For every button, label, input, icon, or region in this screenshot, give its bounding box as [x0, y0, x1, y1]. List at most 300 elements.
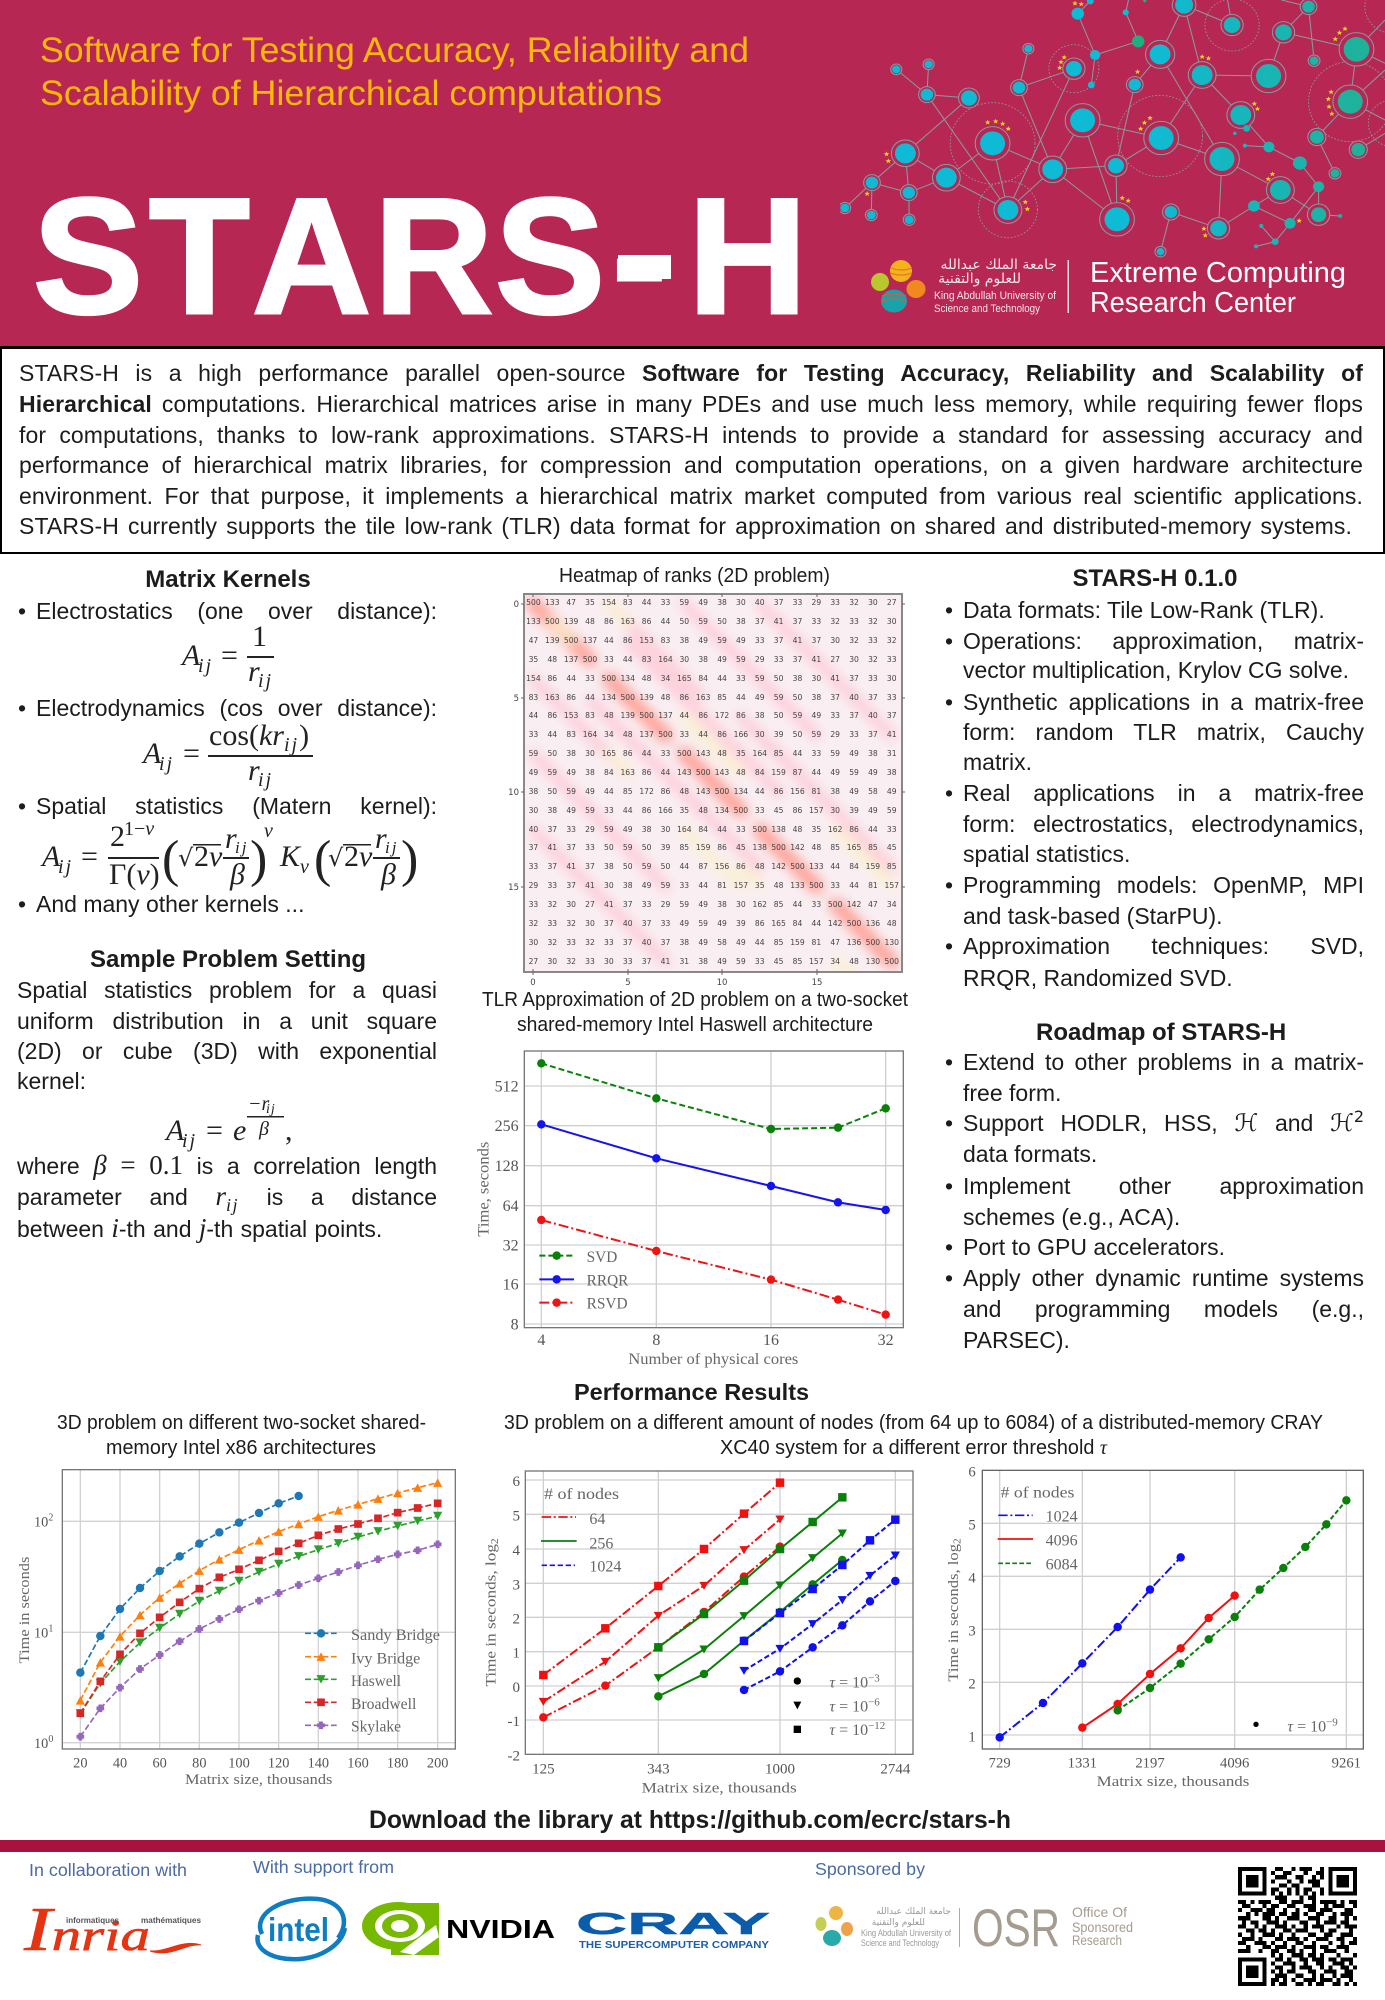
heatmap of ranks: 38	[736, 617, 746, 626]
heatmap of ranks: 157	[884, 881, 899, 890]
heatmap of ranks: 500	[884, 957, 899, 966]
heatmap of ranks: 133	[790, 881, 805, 890]
label: sponsored by: Sponsored by	[815, 1859, 925, 1879]
heatmap of ranks: 130	[884, 938, 899, 947]
heatmap of ranks: 30	[604, 957, 614, 966]
heatmap of ranks: 85	[793, 957, 802, 966]
heatmap of ranks: 154	[526, 674, 541, 683]
heatmap of ranks: 59	[736, 957, 746, 966]
heatmap of ranks: 38	[717, 598, 727, 607]
heatmap of ranks: 32	[868, 617, 878, 626]
heatmap of ranks: 32	[566, 919, 576, 928]
heatmap of ranks: 49	[698, 636, 708, 645]
heatmap of ranks: 45	[774, 806, 783, 815]
panel: STARS-H 0.1.0: spatial statistics.	[963, 841, 1130, 867]
line chart: TLR approximation time vs cores	[475, 1050, 904, 1368]
heatmap of ranks: 500	[564, 636, 578, 645]
line chart: TLR approximation time vs cores: 8	[511, 1316, 519, 1333]
heatmap of ranks: 33	[774, 655, 783, 664]
heatmap of ranks: 33	[811, 900, 821, 909]
heatmap of ranks: 85	[774, 900, 783, 909]
heatmap of ranks: 32	[887, 636, 897, 645]
QR code	[1238, 1867, 1357, 1986]
heatmap of ranks: 30	[830, 806, 840, 815]
heatmap of ranks: 33	[604, 938, 614, 947]
line chart: TLR approximation time vs cores: 64	[503, 1198, 519, 1215]
heatmap of ranks: 500	[639, 711, 654, 720]
heatmap of ranks: 139	[564, 617, 578, 626]
logo: KAUST and Extreme Computing Research Center: Science and Technology	[934, 303, 1040, 315]
heatmap of ranks: 35	[585, 598, 595, 607]
heatmap of ranks: 33	[547, 919, 557, 928]
line chart: TLR approximation time vs cores: 16	[763, 1332, 779, 1349]
heatmap of ranks: 5	[625, 978, 631, 988]
heatmap of ranks: 44	[755, 787, 765, 796]
heatmap of ranks: 500	[583, 655, 597, 664]
heatmap of ranks: 37	[774, 598, 783, 607]
heatmap of ranks: 33	[849, 617, 859, 626]
formula: Matern kernel: )	[250, 831, 267, 888]
chart title: x86 architectures: 3D problem on different two-socket shared-	[57, 1412, 426, 1434]
panel: sample problem setting: where β = 0.1 is a correlation length	[17, 1150, 437, 1180]
line chart: node scaling 64 to 1024: 5	[512, 1508, 520, 1524]
heatmap of ranks: 157	[809, 806, 824, 815]
heatmap of ranks: 38	[529, 787, 538, 796]
heatmap of ranks: 41	[887, 730, 897, 739]
heatmap of ranks: 37	[774, 636, 783, 645]
line chart: node scaling 64 to 1024	[483, 1470, 914, 1796]
heatmap of ranks: 44	[717, 825, 727, 834]
heatmap of ranks: 165	[771, 919, 786, 928]
formula: electrostatics: ij	[198, 655, 213, 677]
formula: electrostatics: A	[180, 639, 201, 672]
heatmap of ranks: 81	[811, 938, 821, 947]
heatmap of ranks: 59	[661, 881, 670, 890]
formula: Matern kernel: K	[279, 840, 302, 873]
heatmap of ranks: 49	[811, 711, 821, 720]
heatmap of ranks: 133	[526, 617, 541, 626]
heatmap of ranks: 38	[698, 655, 708, 664]
heatmap of ranks: 86	[623, 636, 633, 645]
heatmap of ranks: 500	[752, 825, 767, 834]
panel: matrix kernels: And many other kernels ...	[36, 891, 304, 917]
heatmap of ranks: 44	[642, 749, 651, 758]
heatmap of ranks: 0	[514, 600, 519, 610]
formula: electrodynamics: ij	[258, 769, 273, 791]
heatmap of ranks: 86	[661, 787, 670, 796]
formula: Matern kernel	[40, 818, 418, 891]
formula: Matern kernel: 1−ν	[124, 818, 154, 840]
formula: Matern kernel: Γ(ν)	[109, 858, 160, 891]
line chart: TLR approximation time vs cores: 256	[495, 1118, 519, 1135]
heatmap of ranks: 136	[847, 938, 861, 947]
heatmap of ranks: 86	[736, 862, 746, 871]
heatmap of ranks: 49	[849, 749, 859, 758]
heatmap of ranks: 500	[677, 749, 692, 758]
label: with support from: With support from	[253, 1857, 394, 1877]
heatmap of ranks: 164	[658, 655, 673, 664]
heatmap of ranks: 33	[661, 919, 670, 928]
heatmap of ranks: 30	[547, 957, 557, 966]
heatmap of ranks: 48	[623, 730, 633, 739]
heatmap of ranks: 49	[717, 655, 727, 664]
formula: Matern kernel: ν	[264, 820, 275, 842]
panel: roadmap of STARS-H: Support HODLR, HSS, ℋ and ℋ2	[963, 1107, 1364, 1137]
heatmap of ranks: 30	[736, 598, 746, 607]
heatmap of ranks: 37	[642, 957, 651, 966]
heatmap of ranks: 86	[566, 693, 576, 702]
formula: electrodynamics: r	[248, 754, 260, 787]
heatmap of ranks: 44	[623, 655, 633, 664]
heatmap of ranks: 500	[696, 768, 710, 777]
heatmap of ranks: 33	[679, 730, 689, 739]
legend: node counts: 4096	[1046, 1533, 1078, 1550]
heatmap of ranks: 166	[658, 806, 673, 815]
heatmap of ranks: 50	[547, 787, 557, 796]
heatmap of ranks: 33	[585, 957, 595, 966]
heatmap of ranks: 58	[868, 787, 878, 796]
line chart: node scaling 1024 to 6084: 729	[989, 1755, 1011, 1771]
line chart: time by architecture: 20	[73, 1756, 87, 1772]
line chart: node scaling 1024 to 6084: 5	[968, 1518, 976, 1534]
panel: STARS-H 0.1.0: Programming models: OpenMP, MPI	[963, 872, 1364, 898]
logo: KAUST Office of Sponsored Research: Office Of	[1072, 1904, 1127, 1920]
heatmap of ranks: 33	[585, 843, 595, 852]
subtitle	[40, 31, 749, 113]
heatmap of ranks: 85	[717, 693, 727, 702]
heatmap of ranks: 15	[508, 883, 519, 893]
line chart: time by architecture: 1	[48, 1624, 53, 1635]
line chart: time by architecture: 10	[34, 1626, 48, 1642]
intro text box: STARS-H currently supports the tile low-rank (TLR) data format for approximation on shared and distributed-memory systems.	[19, 513, 1352, 539]
heatmap of ranks: 33	[547, 881, 557, 890]
heatmap of ranks: 37	[566, 881, 576, 890]
heatmap of ranks: 38	[811, 693, 821, 702]
panel: STARS-H 0.1.0: and task-based (StarPU).	[963, 903, 1223, 929]
heatmap of ranks: 47	[830, 938, 840, 947]
heatmap of ranks: 40	[623, 919, 633, 928]
heatmap of ranks: 33	[642, 900, 651, 909]
intro text box: Hierarchical computations. Hierarchical matrices arise in many PDEs and use much less memory, while requiring fewer flops	[19, 391, 1363, 417]
legend: error threshold: −9	[1326, 1717, 1338, 1729]
formula: Matern kernel: β	[380, 858, 396, 891]
formula: Matern kernel: β	[229, 858, 245, 891]
heatmap of ranks: 159	[696, 843, 710, 852]
heatmap of ranks: 30	[887, 674, 897, 683]
heatmap of ranks: 33	[830, 598, 840, 607]
heatmap of ranks: 137	[658, 711, 673, 720]
heatmap of ranks: 41	[566, 862, 576, 871]
heatmap of ranks: 143	[715, 768, 729, 777]
legend: decomposition methods: SVD	[587, 1249, 617, 1266]
heatmap of ranks: 50	[661, 862, 670, 871]
panel: STARS-H 0.1.0: Synthetic applications in a matrix-free	[963, 689, 1364, 715]
formula: Matern kernel: r	[225, 822, 237, 855]
subtitle: Software for Testing Accuracy, Reliability and	[40, 31, 749, 70]
legend: node counts: 64	[589, 1511, 605, 1528]
heatmap of ranks: 49	[566, 806, 576, 815]
heatmap of ranks: 32	[830, 617, 840, 626]
heatmap of ranks: 49	[755, 693, 765, 702]
line chart: node scaling 1024 to 6084: 2	[968, 1677, 976, 1693]
heatmap of ranks: 85	[774, 749, 783, 758]
heatmap of ranks: 34	[830, 957, 840, 966]
line chart: node scaling 1024 to 6084: 3	[968, 1624, 976, 1640]
panel: sample problem setting	[17, 946, 437, 1243]
heatmap of ranks: 31	[887, 749, 897, 758]
heatmap of ranks: 86	[793, 806, 802, 815]
heatmap of ranks: 58	[717, 938, 727, 947]
line chart: TLR approximation time vs cores: Number of physical cores	[628, 1351, 798, 1368]
heatmap of ranks: 49	[717, 957, 727, 966]
heatmap of ranks: 50	[604, 843, 614, 852]
panel: roadmap of STARS-H: Extend to other problems in a matrix-	[963, 1049, 1364, 1075]
heatmap of ranks: 37	[811, 636, 821, 645]
panel: matrix kernels	[18, 566, 437, 917]
heatmap of ranks: 85	[623, 787, 633, 796]
heatmap of ranks: 30	[887, 617, 897, 626]
heatmap of ranks: 37	[529, 843, 538, 852]
heatmap of ranks: 86	[679, 693, 689, 702]
formula: exponential kernel: β	[258, 1118, 269, 1140]
line chart: node scaling 1024 to 6084: 1	[968, 1729, 976, 1745]
line chart: node scaling 1024 to 6084: Time in seconds, log	[946, 1560, 962, 1682]
heatmap of ranks: 49	[830, 768, 840, 777]
line chart: node scaling 64 to 1024: 3	[512, 1577, 520, 1593]
heatmap of ranks: 500	[602, 674, 616, 683]
heatmap of ranks: 37	[566, 843, 576, 852]
heatmap of ranks: 41	[774, 617, 783, 626]
chart title: distributed-memory scaling: 3D problem on a different amount of nodes (from 64 up to 6084) of a distributed-memory CRAY	[504, 1412, 1323, 1434]
heatmap of ranks: 49	[698, 900, 708, 909]
panel: roadmap of STARS-H: Implement other approximation	[963, 1173, 1364, 1199]
panel: roadmap of STARS-H: PARSEC).	[963, 1327, 1070, 1353]
line chart: TLR approximation time vs cores: 8	[652, 1332, 660, 1349]
legend: error thresholds: τ = 10	[829, 1674, 868, 1691]
heatmap of ranks: 86	[717, 730, 727, 739]
heatmap of ranks: 138	[752, 843, 767, 852]
heatmap of ranks: 38	[887, 768, 897, 777]
heatmap of ranks: 32	[585, 938, 595, 947]
formula: electrostatics: ij	[258, 670, 273, 692]
panel: roadmap of STARS-H: free form.	[963, 1080, 1061, 1106]
heatmap of ranks: 39	[774, 730, 783, 739]
heatmap of ranks: 35	[736, 749, 746, 758]
heatmap of ranks: 33	[623, 957, 633, 966]
heatmap of ranks: 29	[529, 881, 538, 890]
heatmap of ranks: 32	[547, 900, 557, 909]
heatmap of ranks: 59	[736, 655, 746, 664]
heatmap of ranks: 37	[868, 730, 878, 739]
heatmap of ranks: 44	[679, 862, 689, 871]
heatmap of ranks: 45	[774, 957, 783, 966]
heatmap of ranks: 143	[696, 749, 710, 758]
line chart: TLR approximation time vs cores: 4	[537, 1332, 545, 1349]
heatmap of ranks: 44	[793, 900, 802, 909]
formula: electrodynamics	[141, 719, 313, 791]
formula: Matern kernel: )	[401, 831, 418, 888]
heatmap of ranks: 33	[755, 806, 765, 815]
panel: STARS-H 0.1.0: Operations: approximation, matrix-	[963, 628, 1364, 654]
heatmap of ranks: 59	[811, 730, 821, 739]
heatmap of ranks: 134	[715, 806, 729, 815]
formula: exponential kernel: ,	[285, 1114, 292, 1147]
heatmap of ranks: 33	[679, 881, 689, 890]
heatmap of ranks: 37	[849, 674, 859, 683]
line chart: time by architecture: Matrix size, thousands	[185, 1772, 333, 1788]
heatmap of ranks: 29	[755, 655, 765, 664]
heatmap of ranks: 33	[585, 674, 595, 683]
heatmap of ranks: 86	[774, 787, 783, 796]
heatmap of ranks: 137	[639, 730, 654, 739]
heatmap of ranks: 164	[677, 825, 692, 834]
logo: Cray: CRAY	[576, 1906, 771, 1941]
heatmap of ranks: 84	[755, 768, 765, 777]
line chart: node scaling 1024 to 6084	[946, 1465, 1364, 1790]
heatmap of ranks: 49	[679, 919, 689, 928]
heatmap of ranks: 157	[809, 957, 824, 966]
heatmap of ranks: 49	[849, 787, 859, 796]
heatmap of ranks: 87	[698, 862, 708, 871]
heatmap of ranks: 500	[847, 919, 861, 928]
heatmap of ranks: 48	[661, 693, 670, 702]
heatmap of ranks: 48	[793, 825, 802, 834]
heatmap of ranks: 44	[811, 919, 821, 928]
heatmap of ranks: 37	[887, 711, 897, 720]
heatmap of ranks: 38	[679, 636, 689, 645]
heatmap of ranks: 86	[623, 749, 633, 758]
heatmap of ranks: 47	[566, 598, 576, 607]
heatmap of ranks: 30	[755, 730, 765, 739]
heatmap of ranks: 143	[696, 787, 710, 796]
heatmap of ranks: 35	[679, 806, 689, 815]
formula: electrodynamics: )	[299, 719, 309, 752]
heatmap of ranks: 50	[793, 693, 802, 702]
heatmap of ranks: 48	[717, 749, 727, 758]
heatmap of ranks: 49	[736, 938, 746, 947]
heatmap of ranks: 33	[830, 711, 840, 720]
heatmap of ranks: 50	[623, 862, 633, 871]
TLR chart title: TLR Approximation of 2D problem on a two-socket	[482, 989, 908, 1011]
heatmap of ranks: 81	[868, 881, 878, 890]
heatmap of ranks: 86	[849, 825, 859, 834]
heatmap of ranks: 33	[868, 636, 878, 645]
panel: STARS-H 0.1.0: Data formats: Tile Low-Rank (TLR).	[963, 597, 1325, 623]
line chart: node scaling 64 to 1024: 125	[532, 1761, 555, 1777]
logo: NVIDIA	[362, 1902, 555, 1955]
heatmap of ranks: 59	[849, 768, 859, 777]
heatmap of ranks: 30	[529, 806, 538, 815]
legend: decomposition methods	[539, 1249, 629, 1313]
logo: KAUST and Extreme Computing Research Center: للعلوم والتقنية	[938, 271, 1021, 287]
legend: error thresholds: −6	[868, 1696, 880, 1708]
heatmap of ranks: 48	[755, 862, 765, 871]
formula: Matern kernel: ν	[300, 856, 311, 878]
heatmap of ranks: 50	[774, 674, 783, 683]
heatmap of ranks: 45	[736, 843, 746, 852]
heatmap of ranks: 83	[642, 655, 651, 664]
heatmap of ranks: 33	[604, 655, 614, 664]
heatmap of ranks: 86	[755, 919, 765, 928]
heatmap of ranks: 87	[793, 768, 802, 777]
heatmap of ranks: 44	[755, 938, 765, 947]
panel: STARS-H 0.1.0: RRQR, Randomized SVD.	[963, 965, 1233, 991]
line chart: time by architecture: Time in seconds	[17, 1556, 33, 1663]
heatmap of ranks: 59	[547, 768, 557, 777]
line chart: time by architecture: 0	[48, 1734, 53, 1745]
heatmap of ranks: 33	[566, 938, 576, 947]
heatmap of ranks: 139	[620, 711, 635, 720]
formula: Matern kernel: ij	[385, 838, 398, 857]
heatmap of ranks: 159	[771, 768, 786, 777]
heatmap of ranks: 84	[698, 825, 708, 834]
line chart: time by architecture: 10	[34, 1515, 48, 1531]
heatmap of ranks: 30	[566, 900, 576, 909]
heatmap of ranks: 164	[583, 730, 597, 739]
panel: STARS-H 0.1.0	[946, 565, 1364, 991]
panel: STARS-H 0.1.0: form: electrostatics, electrodynamics,	[963, 811, 1364, 837]
heatmap of ranks: 33	[887, 655, 897, 664]
heatmap of ranks: 38	[547, 806, 557, 815]
line chart: TLR approximation time vs cores: 32	[878, 1332, 894, 1349]
heatmap of ranks: 84	[849, 862, 859, 871]
heatmap of ranks: 49	[585, 787, 595, 796]
heatmap of ranks: 38	[566, 749, 576, 758]
heatmap of ranks: 165	[677, 674, 692, 683]
heatmap of ranks: 44	[642, 598, 651, 607]
logo: Inria: informatiques	[66, 1915, 119, 1925]
footer bar	[0, 1840, 1385, 1852]
heatmap of ranks: 37	[755, 617, 765, 626]
logo: Cray: THE SUPERCOMPUTER COMPANY	[579, 1939, 769, 1951]
heatmap of ranks: 49	[623, 825, 633, 834]
heatmap of ranks: 44	[717, 674, 727, 683]
heatmap of ranks: 30	[868, 598, 878, 607]
line chart: time by architecture	[17, 1469, 456, 1788]
heatmap of ranks: 83	[623, 598, 633, 607]
heatmap of ranks: 142	[847, 900, 861, 909]
heatmap of ranks: 86	[642, 768, 651, 777]
heatmap of ranks: 33	[887, 693, 897, 702]
heatmap of ranks: 500	[771, 843, 786, 852]
heatmap of ranks: 32	[849, 598, 859, 607]
heatmap of ranks: 30	[811, 674, 821, 683]
heatmap of ranks: 30	[585, 919, 595, 928]
logo: NVIDIA: NVIDIA	[446, 1914, 555, 1944]
heatmap of ranks: 156	[715, 862, 729, 871]
heading: performance results: Performance Results	[574, 1379, 809, 1405]
heatmap of ranks: 85	[774, 938, 783, 947]
heatmap of ranks: 41	[793, 636, 802, 645]
heatmap of ranks: 44	[793, 749, 802, 758]
heatmap of ranks: 49	[529, 768, 538, 777]
line chart: node scaling 64 to 1024: Time in seconds, log	[483, 1562, 499, 1687]
heatmap title: Heatmap of ranks (2D problem)	[559, 565, 830, 587]
heatmap of ranks: 38	[830, 787, 840, 796]
heatmap of ranks: 30	[679, 655, 689, 664]
heatmap of ranks: 0	[530, 978, 536, 988]
intro text box: STARS-H is a high performance parallel open-source Software for Testing Accuracy, Reliability and Scalability of	[19, 360, 1363, 386]
line chart: time by architecture: 160	[347, 1756, 369, 1772]
panel: STARS-H 0.1.0: form: random TLR matrix, Cauchy	[963, 719, 1364, 745]
logo: KAUST and Extreme Computing Research Center: Extreme Computing	[1090, 257, 1346, 289]
chart title: distributed-memory scaling: XC40 system for a different error threshold τ	[720, 1437, 1108, 1459]
heatmap of ranks: 33	[736, 674, 746, 683]
formula: electrostatics: =	[221, 639, 238, 672]
line chart: node scaling 1024 to 6084: 4	[968, 1571, 976, 1587]
heatmap of ranks: 44	[849, 881, 859, 890]
heatmap of ranks: 38	[604, 862, 614, 871]
